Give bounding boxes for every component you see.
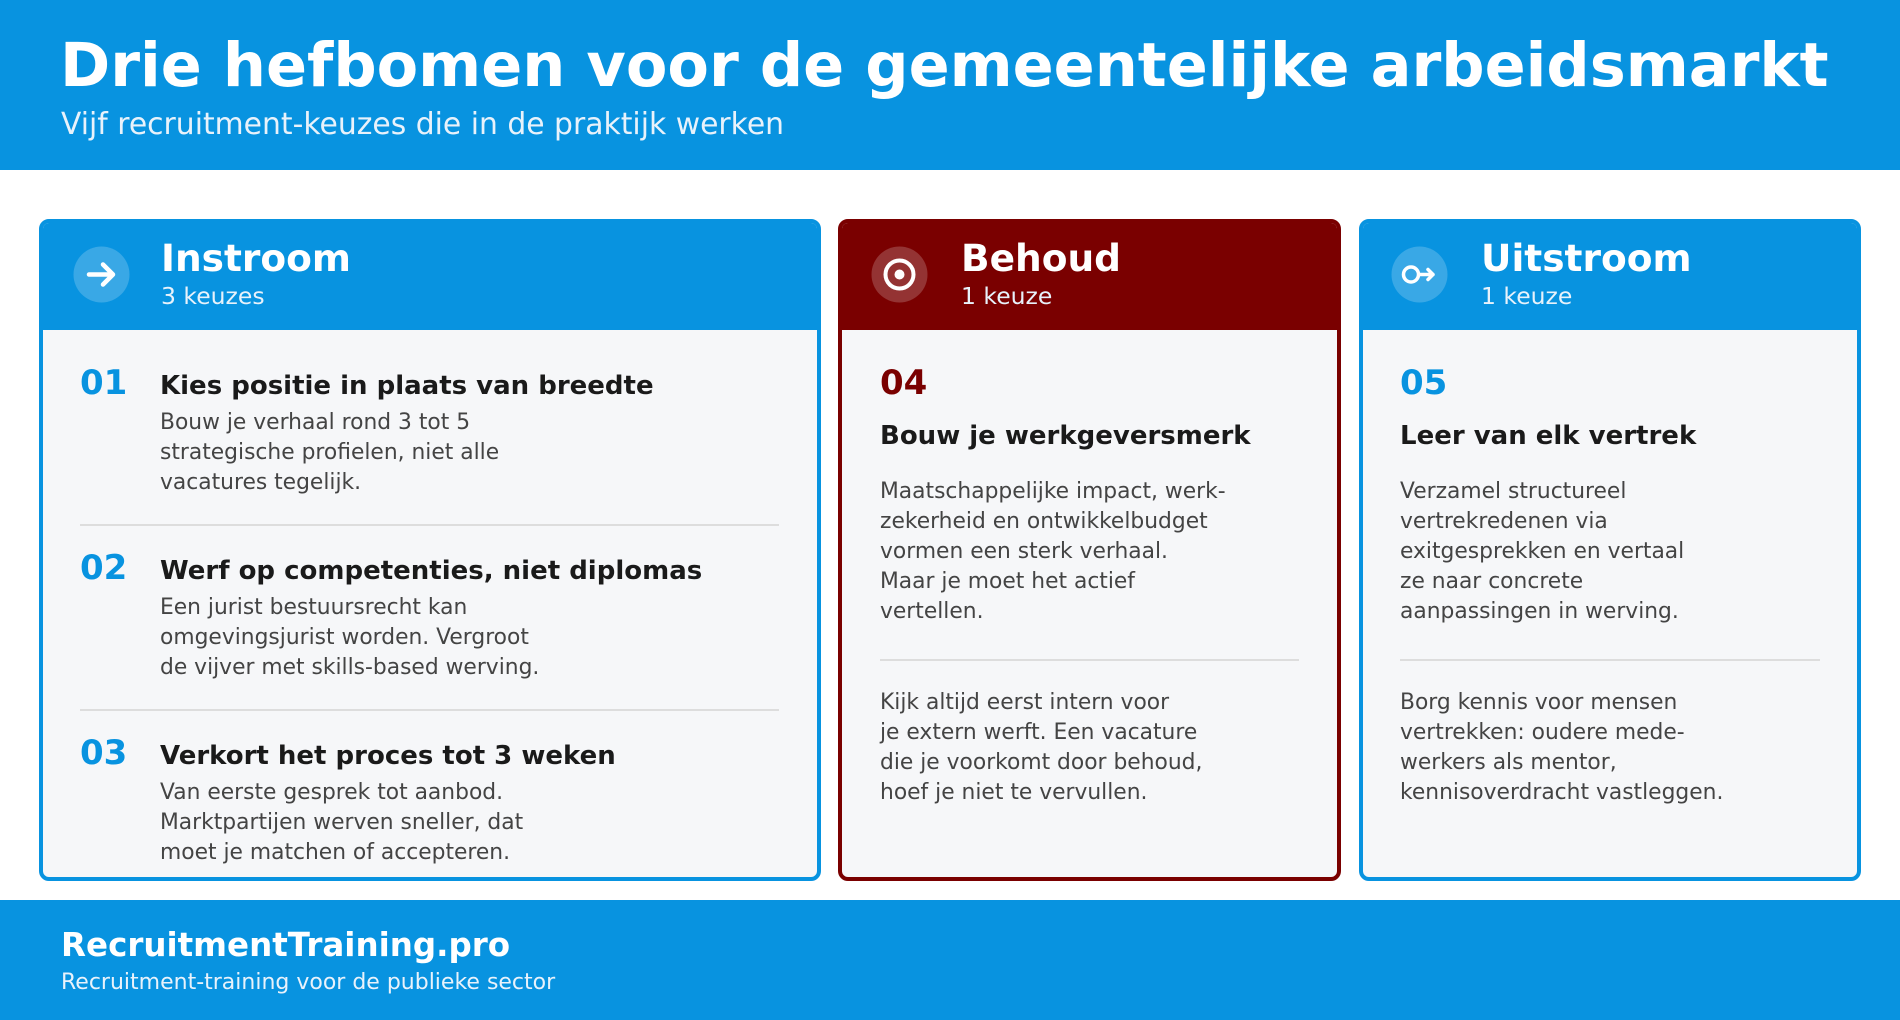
item 02: omgevingsjurist worden. Vergroot <box>160 625 529 650</box>
subtitle: Vijf recruitment-keuzes die in de praktijk werken <box>61 107 784 142</box>
item 05: Verzamel structureel <box>1400 479 1626 504</box>
header band <box>0 0 1900 170</box>
item 01: vacatures tegelijk. <box>160 470 361 495</box>
heading: Uitstroom <box>1481 236 1692 280</box>
item 05: 05 <box>1400 363 1447 403</box>
icon: target <box>872 246 928 302</box>
count: 1 keuze <box>1481 282 1572 310</box>
footer tagline: Recruitment-training voor de publieke sector <box>61 970 555 995</box>
item 04: die je voorkomt door behoud, <box>880 750 1202 775</box>
item 04: hoef je niet te vervullen. <box>880 780 1147 805</box>
item 05: Leer van elk vertrek <box>1400 421 1696 451</box>
item 04: je extern werft. Een vacature <box>880 720 1197 745</box>
item 02: Een jurist bestuursrecht kan <box>160 595 467 620</box>
item 03: Marktpartijen werven sneller, dat <box>160 810 523 835</box>
panel: Behoud <box>838 219 1341 881</box>
footer brand: RecruitmentTraining.pro <box>61 926 510 964</box>
item 05: exitgesprekken en vertaal <box>1400 539 1684 564</box>
item 04 <box>880 363 1299 805</box>
item 05: kennisoverdracht vastleggen. <box>1400 780 1723 805</box>
item 05: aanpassingen in werving. <box>1400 599 1679 624</box>
item 01: 01 <box>80 363 127 403</box>
panel: Uitstroom <box>1359 219 1861 881</box>
item 02: 02 <box>80 548 127 588</box>
item 03: 03 <box>80 733 127 773</box>
footer <box>0 900 1900 1020</box>
item 04: Kijk altijd eerst intern voor <box>880 690 1169 715</box>
heading: Instroom <box>161 236 351 280</box>
icon: arrow <box>74 246 130 302</box>
panel: Instroom <box>39 219 821 881</box>
item 01: Kies positie in plaats van breedte <box>160 371 654 401</box>
item 05: vertrekredenen via <box>1400 509 1608 534</box>
item 04: zekerheid en ontwikkelbudget <box>880 509 1208 534</box>
title: Drie hefbomen voor de gemeentelijke arbeidsmarkt <box>60 31 1829 101</box>
item 05 <box>1400 363 1820 805</box>
panel header <box>842 223 1337 330</box>
item 03 <box>80 733 616 865</box>
item 05: vertrekken: oudere mede- <box>1400 720 1685 745</box>
item 01: strategische profielen, niet alle <box>160 440 499 465</box>
item 05: werkers als mentor, <box>1400 750 1617 775</box>
item 04: vormen een sterk verhaal. <box>880 539 1168 564</box>
item 01: Bouw je verhaal rond 3 tot 5 <box>160 410 470 435</box>
count: 1 keuze <box>961 282 1052 310</box>
item 04: 04 <box>880 363 927 403</box>
item 04: vertellen. <box>880 599 984 624</box>
count: 3 keuzes <box>161 282 265 310</box>
item 04: Maatschappelijke impact, werk- <box>880 479 1226 504</box>
item 03: Van eerste gesprek tot aanbod. <box>160 780 503 805</box>
item 02: de vijver met skills-based werving. <box>160 655 539 680</box>
item 02: Werf op competenties, niet diplomas <box>160 556 702 586</box>
item 05: Borg kennis voor mensen <box>1400 690 1677 715</box>
panel header <box>43 223 817 330</box>
item 01 <box>80 363 654 495</box>
item 03: Verkort het proces tot 3 weken <box>160 741 616 771</box>
item 05: ze naar concrete <box>1400 569 1583 594</box>
item 04: Maar je moet het actief <box>880 569 1135 594</box>
item 04: Bouw je werkgeversmerk <box>880 421 1251 451</box>
heading: Behoud <box>961 236 1121 280</box>
icon: exit <box>1392 246 1448 302</box>
item 03: moet je matchen of accepteren. <box>160 840 510 865</box>
item 02 <box>80 548 702 680</box>
panel header <box>1363 223 1857 330</box>
